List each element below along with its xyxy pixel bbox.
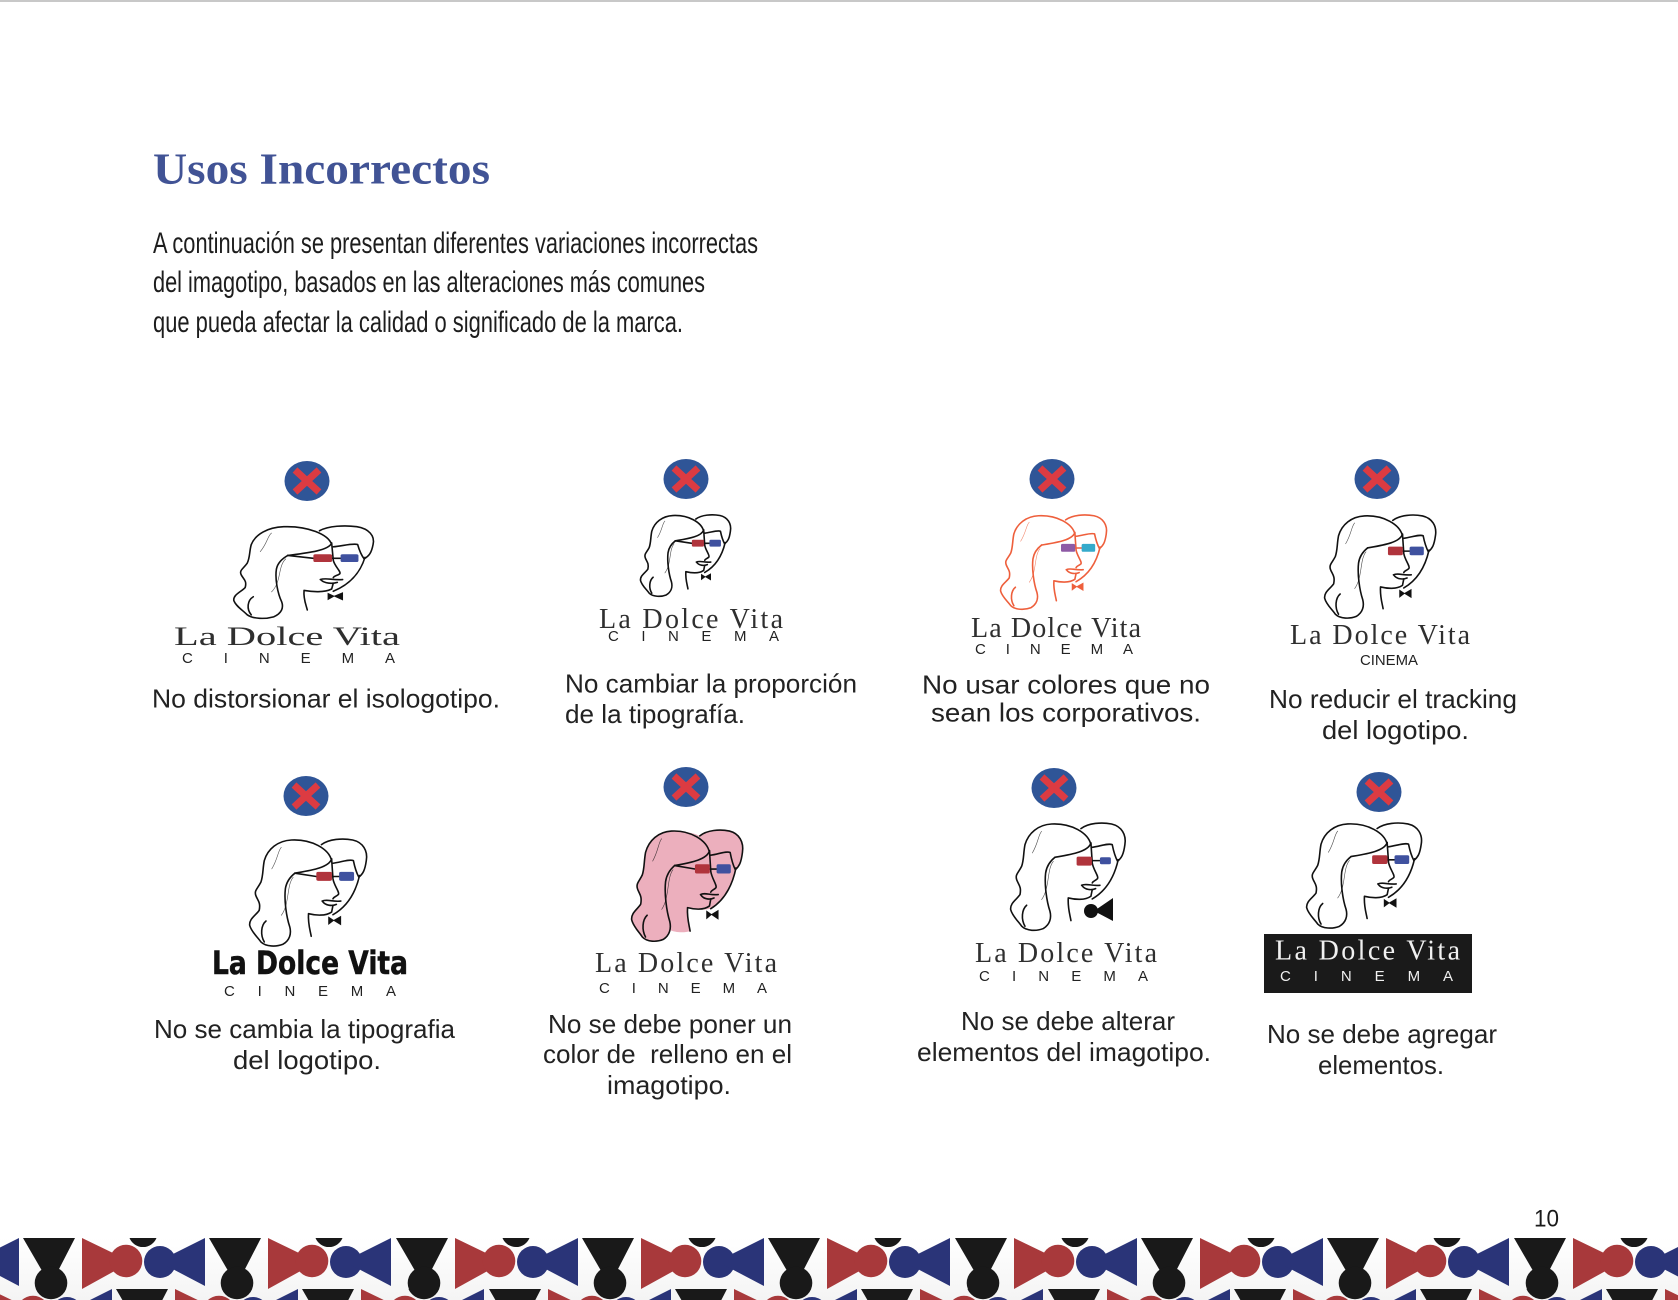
wordmark subtitle: CINEMA	[1280, 968, 1453, 985]
icon: prohibited mark	[1356, 772, 1402, 812]
wordmark: La Dolce Vita	[595, 948, 778, 979]
caption: del logotipo.	[1322, 715, 1469, 745]
logo drawing	[250, 839, 367, 946]
caption: de la tipografía.	[565, 699, 745, 729]
caption: No se debe poner un	[548, 1009, 792, 1039]
caption: No distorsionar el isologotipo.	[152, 684, 500, 714]
caption: elementos del imagotipo.	[917, 1037, 1211, 1067]
icon: prohibited mark	[1030, 459, 1074, 499]
wordmark subtitle: CINEMA	[608, 628, 779, 645]
wordmark: La Dolce Vita	[174, 622, 401, 651]
wordmark: La Dolce Vita	[971, 613, 1142, 644]
icon: prohibited mark	[1354, 459, 1400, 499]
caption: No se cambia la tipografia	[154, 1014, 456, 1044]
wordmark: La Dolce Vita	[975, 938, 1158, 969]
icon: prohibited mark	[664, 459, 708, 499]
page number: 10	[1534, 1206, 1559, 1232]
enlarged bow tie	[1084, 898, 1113, 921]
wordmark subtitle: CINEMA	[224, 983, 396, 1000]
caption: No cambiar la proporción	[565, 668, 857, 698]
recoloured logo drawing	[1001, 515, 1107, 609]
distorted logo drawing	[234, 526, 373, 618]
caption: No se debe agregar	[1267, 1019, 1497, 1049]
icon: prohibited mark	[284, 461, 330, 501]
caption	[1267, 1019, 1497, 1080]
icon: prohibited mark	[664, 767, 708, 807]
intro paragraph	[153, 227, 758, 339]
wordmark in wrong typeface: La Dolce Vita	[212, 944, 408, 982]
logo drawing	[1307, 823, 1422, 928]
intro paragraph: del imagotipo, basados en las alteraciones más comunes	[153, 266, 705, 299]
caption	[917, 1006, 1211, 1067]
wordmark: La Dolce Vita	[1290, 620, 1471, 651]
icon: prohibited mark	[1032, 768, 1076, 808]
caption: No reducir el tracking	[1269, 684, 1517, 714]
caption: imagotipo.	[607, 1070, 731, 1100]
panel: no poner color de relleno	[543, 767, 792, 1100]
panel: no cambiar la proporcion	[565, 459, 857, 729]
wordmark subtitle: CINEMA	[599, 980, 767, 997]
panel: no distorsionar	[152, 461, 500, 714]
panel: no reducir el tracking	[1269, 459, 1517, 745]
wordmark subtitle: CINEMA	[975, 641, 1133, 658]
panel: no cambiar la tipografia	[154, 776, 456, 1075]
caption: No usar colores que no	[922, 670, 1210, 700]
caption	[154, 1014, 456, 1075]
wordmark: La Dolce Vita	[599, 604, 784, 635]
wordmark: La Dolce Vita	[1275, 936, 1461, 966]
icon: prohibited mark	[284, 776, 328, 816]
panel: no agregar elementos	[1264, 772, 1497, 1080]
wordmark subtitle, tight tracking: CINEMA	[1360, 652, 1418, 669]
intro paragraph: que pueda afectar la calidad o significado de la marca.	[153, 306, 683, 339]
wordmark subtitle: CINEMA	[979, 968, 1148, 985]
caption	[543, 1009, 792, 1100]
panel: no usar otros colores	[922, 459, 1210, 728]
filled logo drawing	[632, 830, 743, 941]
wordmark subtitle: CINEMA	[182, 650, 395, 667]
black box behind wordmark	[1264, 934, 1472, 993]
caption: No se debe alterar	[961, 1006, 1175, 1036]
logo drawing	[640, 515, 731, 596]
caption	[1269, 684, 1517, 745]
caption: elementos.	[1318, 1050, 1444, 1080]
caption	[922, 670, 1210, 728]
caption: color de relleno en el	[543, 1039, 792, 1069]
logo drawing	[1325, 515, 1436, 618]
caption	[565, 668, 857, 729]
caption: del logotipo.	[233, 1045, 381, 1075]
caption: sean los corporativos.	[931, 698, 1201, 728]
logo drawing with small blue lens	[1011, 823, 1125, 930]
title: Usos Incorrectos	[153, 144, 490, 194]
panel: no alterar elementos	[917, 768, 1211, 1067]
intro paragraph: A continuación se presentan diferentes variaciones incorrectas	[153, 227, 758, 260]
decorative bow-tie pattern band	[0, 1238, 1678, 1300]
